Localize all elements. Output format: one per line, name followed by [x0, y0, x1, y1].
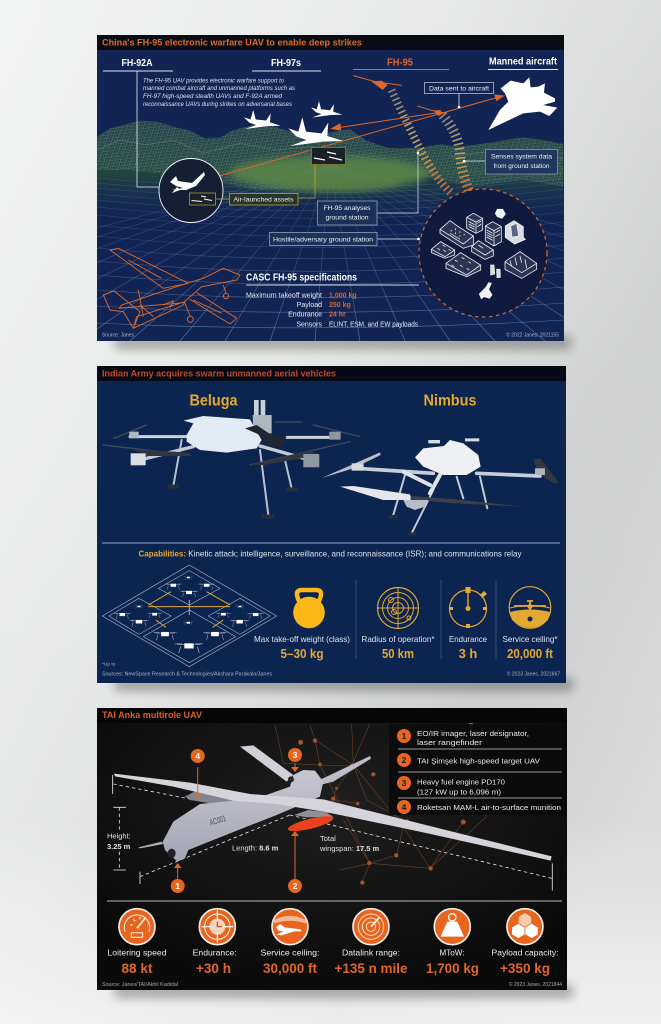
- stat: max take-off weight: Max take-off weight (class): [254, 635, 350, 644]
- stat: endurance: Endurance: [449, 635, 487, 644]
- callout: senses system data: from ground station: [494, 163, 550, 170]
- stat: max take-off weight: 5–30 kg: [280, 646, 324, 661]
- stat: service ceiling: [502, 635, 558, 661]
- copyright note: © 2023 Janes. 2021667: [507, 670, 560, 677]
- header bar: [97, 366, 566, 381]
- icon: Anka UAV: AC001: [208, 813, 227, 828]
- callout: air-launched assets: Air-launched assets: [234, 196, 294, 204]
- dimension lines: [113, 775, 552, 891]
- footnote: *Up to: [102, 662, 116, 668]
- column heading: FH-97s: [252, 58, 321, 71]
- stat dividers: [356, 580, 496, 659]
- stat labels: Service ceiling:: [260, 948, 320, 957]
- callout marker 2: [288, 831, 302, 893]
- stat labels: Payload capacity:: [492, 948, 558, 957]
- callout marker 1: [171, 863, 185, 893]
- stat: endurance: 3 h: [459, 646, 477, 661]
- icon: radar: [377, 587, 419, 629]
- icon: Beluga drone: [103, 400, 360, 517]
- icon: FH-92A drone: [170, 172, 205, 193]
- icon: weight: [441, 914, 464, 937]
- key item 1: laser rangefinder: [417, 738, 483, 747]
- label: height: Height:: [107, 832, 131, 840]
- icon: munitions box: [312, 148, 346, 164]
- column heading: FH-95: [353, 58, 449, 70]
- panel: TAI Anka multirole UAV: [97, 708, 567, 990]
- key item 4: 4: [402, 802, 407, 812]
- key item 3: [397, 776, 505, 796]
- icon: payload boxes: [512, 913, 538, 939]
- circle inset: hostile ground station: [419, 189, 547, 317]
- column heading: FH-92A: [103, 58, 173, 71]
- icon: FH-97 jets: [244, 101, 343, 146]
- stat labels: Datalink range:: [342, 948, 400, 957]
- stat labels: [108, 948, 558, 957]
- icon: Nimbus drone: [322, 438, 558, 534]
- panel shadows: [115, 336, 573, 998]
- header bar: [130, 708, 534, 723]
- stat: max take-off weight: [254, 635, 350, 661]
- callout marker 1: 1: [175, 881, 180, 891]
- label: wingspan: Total: [320, 834, 336, 843]
- label: wingspan: wingspan: 17.5 m: [319, 844, 380, 853]
- stat values: +350 kg: [500, 960, 550, 976]
- label: height: 3.25 m: [107, 842, 131, 851]
- specifications table: [246, 272, 419, 328]
- panel: Indian Army swarm UAVs: [97, 366, 566, 683]
- key item 3: (127 kW up to 6,096 m): [417, 788, 502, 796]
- key item 1: 1: [402, 731, 407, 741]
- background network: [275, 722, 487, 885]
- icon: manned aircraft: [488, 77, 557, 130]
- stat labels: Endurance:: [193, 948, 237, 957]
- callout: FH-95 analyses ground station: [318, 152, 419, 225]
- icon: aircraft ascending: [274, 916, 306, 935]
- stat: radius of operation: [362, 635, 435, 661]
- key item 4: [397, 800, 561, 814]
- callout: hostile ground station: [270, 232, 420, 246]
- key item 2: 2: [402, 755, 407, 765]
- air-launched assets connector: [298, 164, 315, 198]
- icon: ground station buildings: [431, 209, 537, 299]
- swarm network diagram: [102, 565, 277, 667]
- specifications table: Maximum takeoff weight: [246, 292, 322, 300]
- icon: radar dish: [358, 914, 384, 939]
- callout: FH-95 analyses ground station: ground station: [326, 214, 369, 222]
- callout marker 4: 4: [195, 751, 200, 761]
- label: height: [107, 832, 131, 851]
- label: wingspan: [319, 834, 380, 853]
- divider: [107, 900, 562, 902]
- source note: Source: Janes: [102, 332, 134, 338]
- label: length: Length: 8.6 m: [232, 844, 279, 852]
- callout marker 3: 3: [293, 750, 298, 760]
- icon: aircraft altitude: [509, 587, 551, 628]
- description text: reconnaissance UAVs during strikes on adversarial bases: [143, 102, 292, 108]
- description text: The FH-95 UAV provides electronic warfare support to: [143, 78, 285, 84]
- icon: clock with target: [201, 911, 233, 943]
- signal waves: [392, 90, 470, 193]
- icon: FH-95 UAV second position: [417, 106, 447, 116]
- icon: munitions small box: [190, 193, 216, 205]
- stat labels: MToW:: [440, 948, 464, 957]
- FH-92A leader line: [137, 71, 160, 187]
- stat values: +135 n mile: [334, 960, 408, 976]
- heading: Nimbus: Nimbus: [424, 392, 477, 410]
- callout: data sent to aircraft: Data sent to aircraft: [429, 85, 489, 92]
- column heading: FH-92A: FH-92A: [122, 58, 152, 69]
- specifications table: ELINT, ESM, and EW payloads: [329, 322, 418, 328]
- stat values: 30,000 ft: [263, 960, 317, 976]
- key item 1: EO/IR imager, laser designator,: [417, 729, 529, 738]
- specifications table: 24 hr: [329, 312, 346, 318]
- callout: data sent to aircraft: [424, 82, 494, 108]
- description text: FH-97 high-speed stealth UAVs and F-92A armed: [143, 94, 283, 100]
- icon: speedometer: [124, 915, 150, 937]
- stat: endurance: [449, 635, 487, 661]
- specifications table: 1,000 kg: [329, 292, 357, 300]
- divider: [102, 542, 560, 544]
- description text: [143, 78, 295, 108]
- key item 2: [397, 753, 540, 767]
- key item 2: TAI Şimşek high-speed target UAV: [417, 756, 540, 766]
- panel: China's FH-95 electronic warfare UAV: [97, 35, 564, 341]
- stat labels: Loitering speed: [108, 948, 166, 957]
- key panel: [389, 724, 567, 815]
- heading: Beluga: Beluga: [190, 392, 238, 410]
- title: China's FH-95 electronic warfare UAV to enable deep strikes: [102, 38, 362, 48]
- specifications table: CASC FH-95 specifications: [246, 272, 357, 283]
- specifications table: Endurance: [288, 312, 322, 318]
- source note: Source: Janes/TAI/Akhil Kadidal: [102, 982, 178, 988]
- specifications table: 250 kg: [329, 302, 351, 309]
- callout: hostile ground station: Hostile/adversary ground station: [273, 236, 373, 244]
- title: Indian Army acquires swarm unmanned aerial vehicles: [102, 368, 336, 378]
- icon: orange outline FH-95 drawing: [103, 248, 240, 328]
- description text: manned combat aircraft and unmanned platforms such as: [143, 86, 295, 92]
- stat: radius of operation: 50 km: [382, 646, 414, 661]
- callout: senses system data: [463, 150, 558, 174]
- icon: stopwatch: [449, 587, 487, 628]
- callout marker 3: [288, 748, 302, 772]
- stat values: 88 kt: [122, 960, 153, 976]
- header bar: [97, 35, 564, 50]
- column heading: FH-97s: FH-97s: [271, 58, 301, 69]
- title: TAI Anka multirole UAV: [102, 710, 202, 720]
- icon: FH-95 UAV: [353, 76, 402, 90]
- callout: senses system data: Senses system data: [491, 154, 552, 161]
- circle inset: FH-92A: [159, 158, 223, 222]
- mountain terrain: [97, 120, 564, 200]
- callout marker 4: [191, 749, 205, 798]
- icon: Anka UAV: [114, 745, 552, 862]
- callout: FH-95 analyses ground station: FH-95 analyses: [324, 205, 371, 212]
- source note: Sources: NewSpace Research & Technologies/Akshara Parakala/Janes: [102, 671, 273, 677]
- specifications table: Payload: [297, 302, 322, 309]
- stat values: +30 h: [196, 960, 231, 976]
- column heading: FH-95: FH-95: [387, 58, 413, 68]
- column heading: Manned aircraft: Manned aircraft: [489, 56, 558, 68]
- callout: air-launched assets: [216, 194, 298, 205]
- callout marker 2: 2: [293, 881, 298, 891]
- stat values: [122, 960, 550, 976]
- key item 3: Heavy fuel engine PD170: [417, 778, 505, 786]
- stat: service ceiling: Service ceiling*: [502, 635, 558, 644]
- arrows: orange data links: [209, 95, 503, 179]
- stats row: [119, 909, 543, 945]
- key item 4: Roketsan MAM-L air-to-surface munition: [417, 803, 561, 812]
- key item 1: [397, 729, 529, 747]
- specifications table: Sensors: [296, 322, 322, 328]
- copyright note: © 2022 Janes: 2021155: [506, 332, 559, 338]
- key item 3: 3: [402, 778, 407, 788]
- copyright note: © 2023 Janes. 2021844: [509, 981, 562, 988]
- capabilities line: Capabilities: Kinetic attack; intelligence, surveillance, and reconnaissance (ISR); and communications relay: [138, 550, 522, 559]
- stat values: 1,700 kg: [426, 960, 479, 976]
- icon: kettlebell: [293, 590, 325, 628]
- stat: service ceiling: 20,000 ft: [507, 646, 554, 661]
- floor grid: [97, 165, 564, 341]
- stat: radius of operation: Radius of operation*: [362, 635, 435, 644]
